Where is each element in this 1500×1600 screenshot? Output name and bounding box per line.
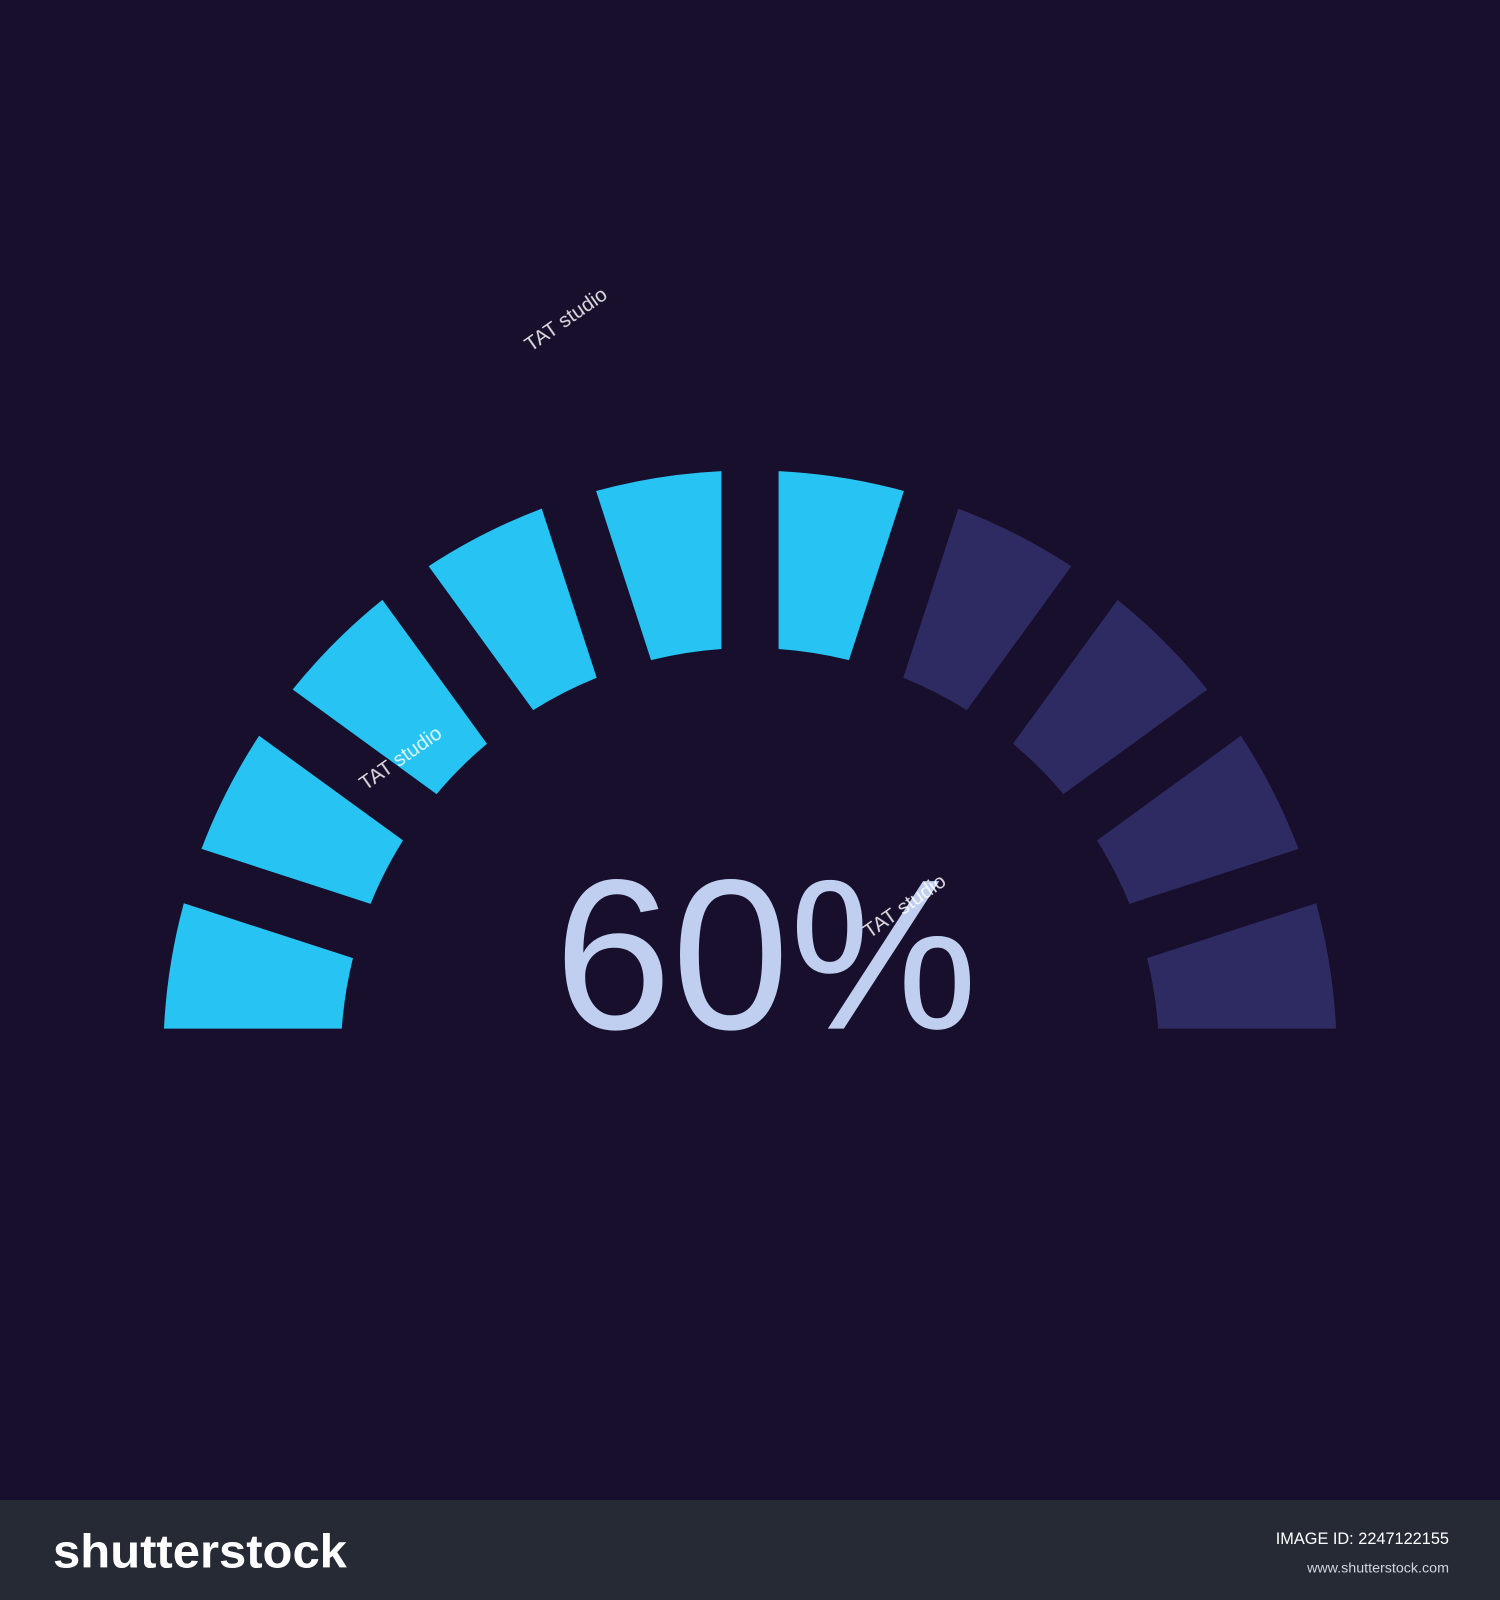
segment 2 (filled)	[201, 730, 420, 907]
gauge: semicircular segmented meter	[164, 452, 1355, 1081]
segment 5 (filled)	[596, 452, 774, 671]
segment 1 (filled)	[164, 903, 353, 1029]
percentage value: 60%	[554, 836, 978, 1075]
watermark text: TAT studio	[356, 722, 446, 795]
footer image id: IMAGE ID: 2247122155	[1276, 1530, 1449, 1548]
segment 4 (filled)	[429, 493, 641, 719]
segment 3 (filled)	[293, 588, 519, 801]
segment 7 (empty)	[900, 509, 1077, 727]
watermark text	[356, 284, 950, 943]
footer bar	[0, 1500, 1500, 1600]
footer url: www.shutterstock.com	[1306, 1560, 1449, 1576]
watermark text: TAT studio	[860, 870, 950, 943]
segment 8 (empty)	[1006, 600, 1219, 826]
segment 9 (empty)	[1088, 736, 1315, 948]
segment 6 (filled)	[779, 471, 904, 660]
segment 10 (empty)	[1136, 903, 1355, 1081]
footer logo: shutterstock	[53, 1525, 348, 1577]
watermark text: TAT studio	[521, 284, 611, 356]
